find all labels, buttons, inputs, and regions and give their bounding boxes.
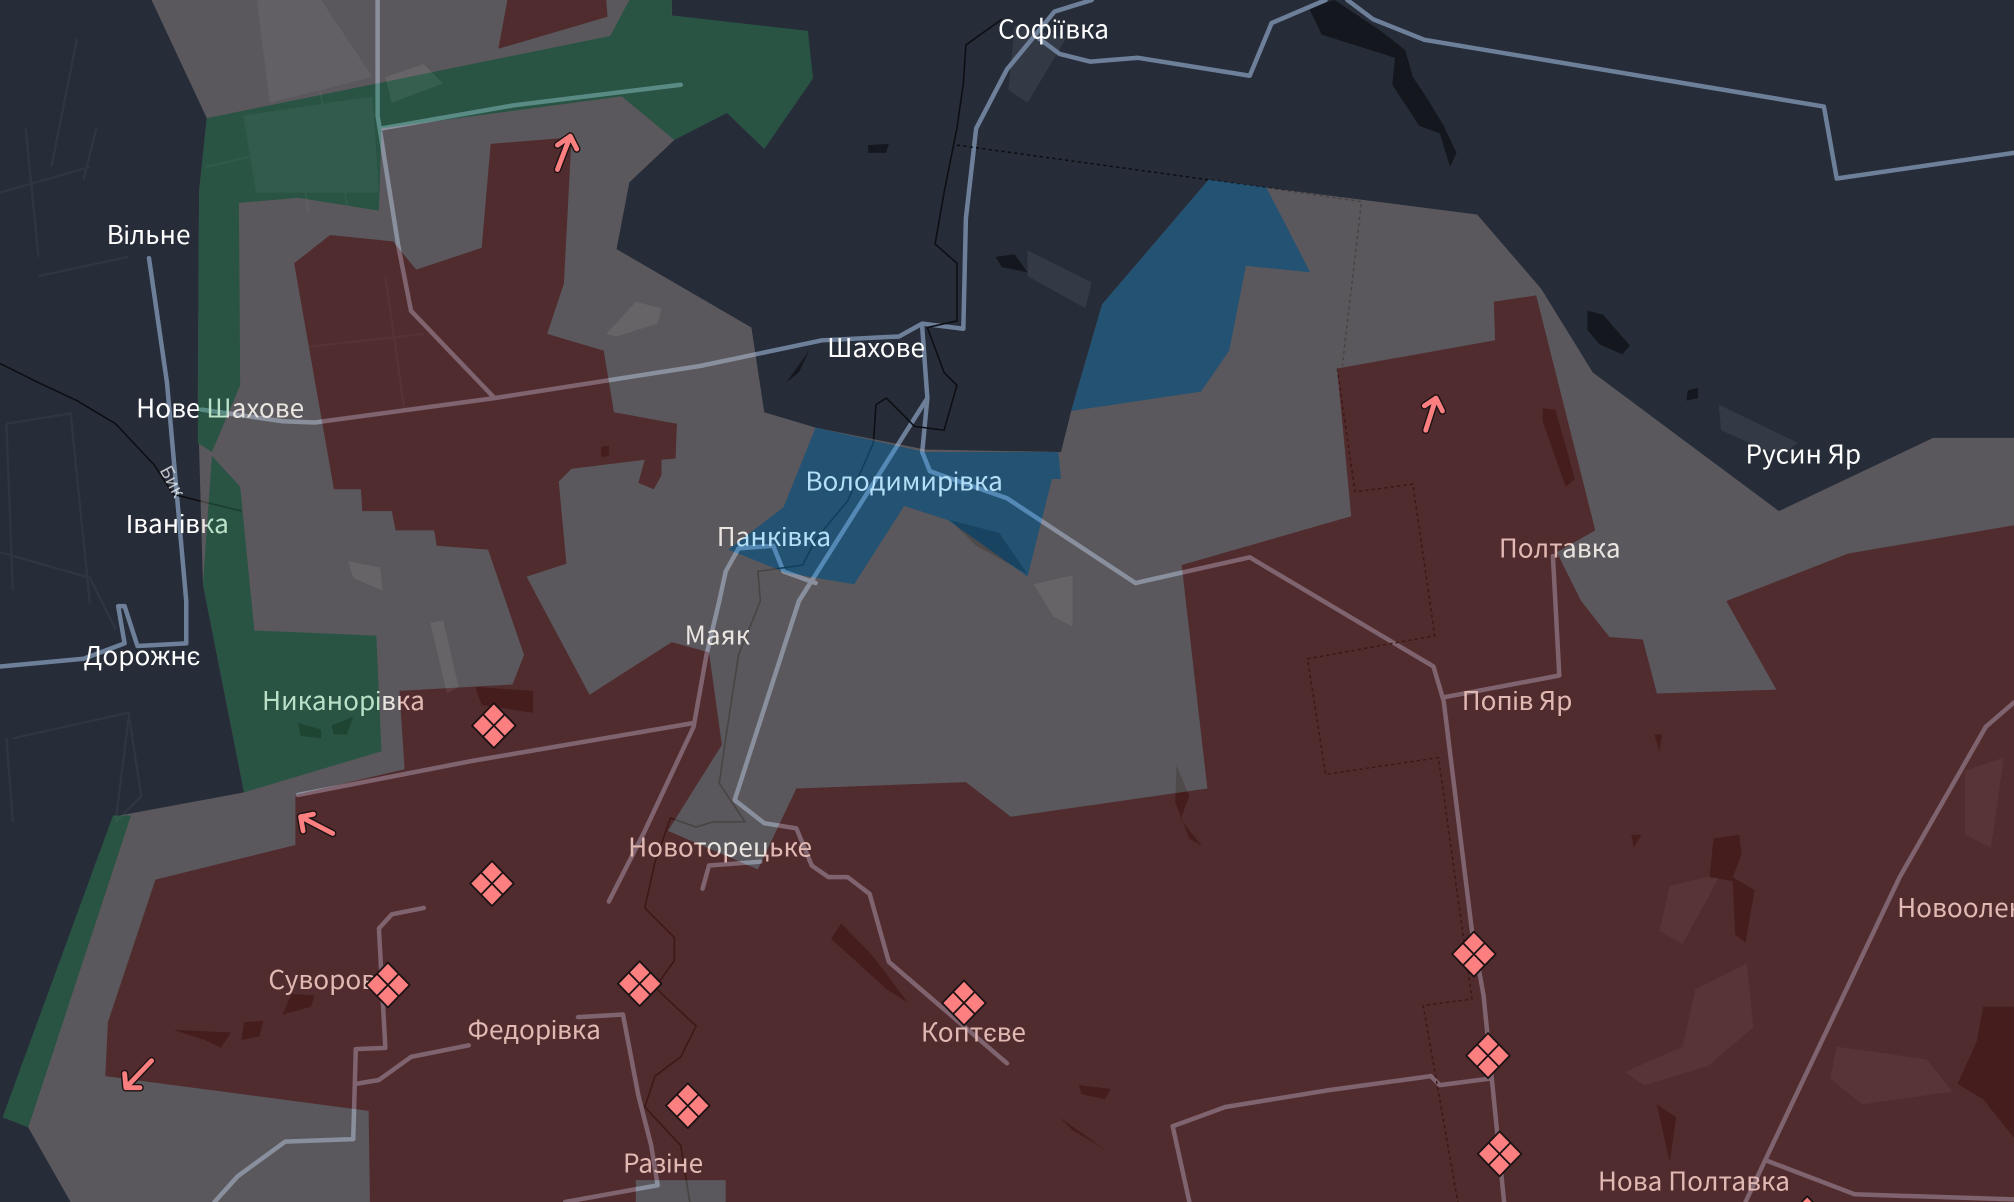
river — [0, 19, 1002, 1202]
diamond marker 2 — [470, 861, 514, 906]
label: Pankivka: Панківка — [717, 516, 831, 554]
settlement patches — [348, 64, 1073, 693]
arrow: west near Nykanorivka — [301, 814, 333, 833]
arrow: north near Poltavka — [1424, 398, 1442, 430]
border dotted lines — [957, 145, 1472, 1202]
label: Dorozhnie: Дорожнє — [83, 635, 200, 673]
label: Volodymyrivka: Володимирівка — [805, 461, 1003, 499]
label: Vilne: Вільне — [107, 214, 191, 252]
territory: green upper area — [198, 0, 813, 452]
label: Maiak: Маяк — [685, 615, 751, 653]
diamond marker 5 — [666, 1083, 710, 1128]
diamond marker 6 — [942, 980, 986, 1025]
diamond marker 3 — [366, 962, 410, 1007]
diamond marker 10 — [1785, 1196, 1829, 1202]
label: Shakhove: Шахове — [827, 327, 925, 365]
label: Razine: Разіне — [623, 1142, 703, 1180]
arrow: south-west near lower strip — [125, 1061, 152, 1088]
label: river Byk: Бик — [154, 461, 192, 502]
label: Fedorivka: Федорівка — [468, 1009, 601, 1047]
territory: blue centre — [728, 428, 1061, 584]
diamond marker 1 — [472, 703, 516, 748]
label: Sofiivka: Софіївка — [998, 9, 1109, 47]
territory: red small top — [498, 0, 608, 49]
territory: green lower strip — [3, 815, 131, 1128]
label: Novotoretske: Новоторецьке — [628, 827, 812, 865]
territory: blue north-east — [1071, 180, 1310, 411]
label: Ivanivka: Іванівка — [126, 503, 229, 541]
arrow: north near top red area — [557, 136, 577, 170]
label: Suvorove: Суворове — [268, 959, 391, 997]
label: Rusyn Yar: Русин Яр — [1746, 434, 1861, 472]
diamond marker 4 — [618, 961, 661, 1006]
territory: green Nykanorivka area — [203, 456, 381, 792]
label: Nykanorivka: Никанорівка — [262, 680, 425, 718]
diamond marker 7 — [1452, 932, 1496, 977]
diamond marker 8 — [1466, 1033, 1510, 1078]
label: Poltavka: Полтавка — [1499, 527, 1621, 565]
label: Popiv Yar: Попів Яр — [1462, 680, 1572, 718]
faint field lines — [0, 0, 424, 822]
label: Koptieve: Коптєве — [921, 1011, 1026, 1049]
label: Nova Poltavka: Нова Полтавка — [1598, 1160, 1790, 1198]
label: Nove Shakhove: Нове Шахове — [136, 387, 304, 425]
advance arrows — [125, 136, 1442, 1088]
markers: diamonds — [366, 703, 1829, 1202]
diamond marker 9 — [1478, 1131, 1521, 1176]
